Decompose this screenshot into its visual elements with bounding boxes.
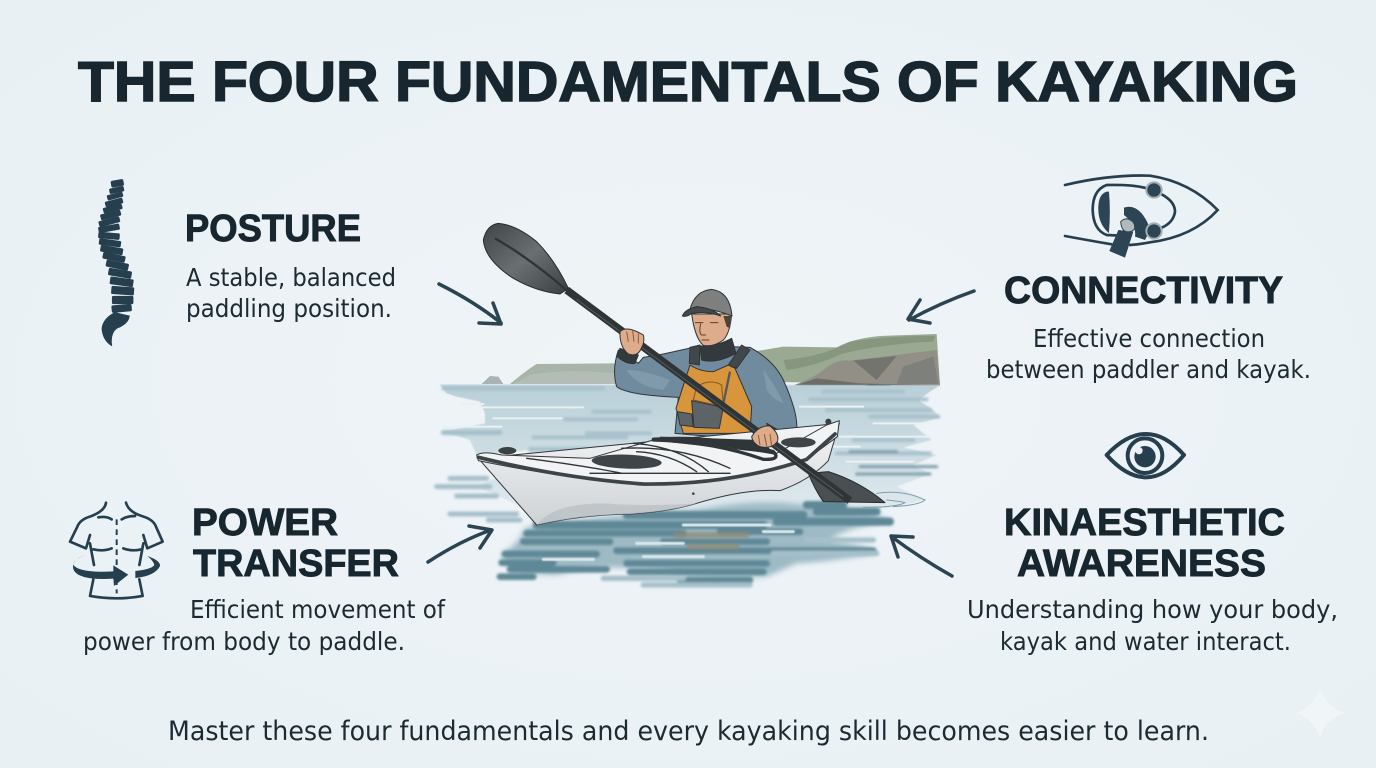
panel: kinaesthetic awareness <box>967 434 1338 656</box>
illustration: paddler in sea kayak <box>437 223 940 585</box>
arrow: posture to kayak <box>439 284 501 324</box>
vest straps <box>689 345 750 368</box>
lower cuff <box>767 423 785 443</box>
description: connectivity: between paddler and kayak. <box>986 355 1311 384</box>
heading: kinaesthetic awareness <box>1004 502 1285 585</box>
paddle <box>483 223 885 503</box>
heading: connectivity: CONNECTIVITY <box>1004 270 1283 312</box>
heading: power transfer: POWER <box>192 502 338 544</box>
neck and collar <box>700 338 736 361</box>
sprayskirt <box>660 437 777 455</box>
lower blade <box>808 472 885 503</box>
heading: posture: POSTURE <box>185 208 361 250</box>
icon: eye <box>1107 434 1184 477</box>
front hatch <box>591 453 662 470</box>
cap <box>690 289 732 316</box>
upper blade <box>483 223 568 294</box>
headland: right with cliff <box>753 334 940 388</box>
description: power transfer <box>83 595 446 656</box>
sleeve cuff <box>617 348 638 364</box>
hair <box>723 316 732 328</box>
shaft <box>567 290 850 501</box>
jacket highlight <box>627 370 783 403</box>
stern toggle <box>825 419 831 425</box>
description: kinaesthetic awareness: Understanding how your body, <box>967 595 1338 624</box>
face features <box>695 323 718 340</box>
bow toggle <box>498 447 516 454</box>
face <box>692 314 732 346</box>
description: posture: A stable, balanced <box>186 263 396 292</box>
vest zip <box>723 372 730 407</box>
icon: spine <box>98 179 134 346</box>
vest pocket <box>677 401 723 428</box>
panel: posture <box>98 179 396 346</box>
heading: power transfer: TRANSFER <box>193 543 399 585</box>
description: posture <box>186 263 396 323</box>
rear hatch <box>781 437 816 447</box>
lower hand <box>752 426 778 447</box>
heading: kinaesthetic awareness: KINAESTHETIC <box>1004 502 1285 544</box>
vest panel <box>693 382 723 407</box>
description: posture: paddling position. <box>186 294 392 323</box>
description: connectivity <box>986 324 1311 384</box>
description: power transfer: power from body to paddle. <box>83 627 405 656</box>
cap brim <box>682 307 721 316</box>
arrow: awareness to kayak <box>891 536 952 576</box>
paddler body <box>615 289 797 443</box>
icon: sparkle watermark <box>1296 688 1345 738</box>
deck <box>477 421 839 484</box>
upper hand <box>620 329 644 355</box>
jacket <box>615 347 797 443</box>
arrow: connectivity to kayak <box>908 291 974 323</box>
deck lines <box>527 443 730 473</box>
hull <box>478 423 839 525</box>
description: power transfer: Efficient movement of <box>190 595 446 624</box>
panel: connectivity <box>986 176 1311 384</box>
icon: kayak cockpit <box>1065 176 1218 258</box>
hull screw <box>692 492 695 495</box>
panel: power transfer <box>70 502 446 656</box>
description: kinaesthetic awareness <box>967 595 1338 656</box>
hull shading <box>537 503 697 525</box>
title: THE FOUR FUNDAMENTALS OF KAYAKING <box>78 50 1298 114</box>
heading: power transfer <box>192 502 399 585</box>
reflection in water <box>500 492 925 585</box>
footer message: Master these four fundamentals and every kayaking skill becomes easier to learn. <box>168 716 1209 747</box>
icon: torso with rotation arrow <box>70 503 163 598</box>
description: connectivity: Effective connection <box>1033 324 1265 353</box>
life vest <box>676 365 752 433</box>
cockpit rim <box>653 438 776 459</box>
kayak <box>477 419 839 525</box>
blade ridge <box>495 238 568 292</box>
heading: kinaesthetic awareness: AWARENESS <box>1017 543 1266 585</box>
water surface <box>437 385 940 520</box>
rim line <box>478 434 835 484</box>
headland: left <box>482 363 617 384</box>
description: kinaesthetic awareness: kayak and water interact. <box>1000 627 1291 656</box>
arrow: power transfer to kayak <box>428 526 492 562</box>
